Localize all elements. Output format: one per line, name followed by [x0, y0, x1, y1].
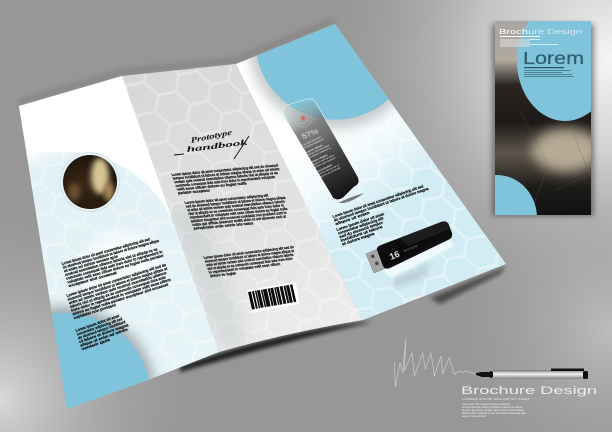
text block: middle panel paragraph 3: enim ad minim veniam quis nostrud exercitation ullamco laboris [205, 252, 294, 267]
cover text lines [500, 36, 574, 77]
text block: middle panel paragraph 3: dolore eu fugiat [209, 270, 237, 278]
card details: Exercitation [315, 163, 333, 174]
panel: right brochure panel [236, 24, 506, 320]
signature scribble [394, 338, 476, 387]
small print: ut enim ad minim veniam quis nostrud exercitation [462, 409, 525, 412]
text block: right panel paragraph 2 [336, 211, 391, 246]
panel: left brochure panel [19, 76, 219, 409]
small print: laboris nisi ut aliquip ex ea commodo consequat duis [462, 412, 527, 415]
text block: right panel paragraph 2: sed do eiusmod tempor [338, 220, 384, 239]
title: Brochure Design: Brochure Design [461, 385, 597, 397]
card details: consectetur adipiscing elit [303, 138, 325, 150]
text block: right panel paragraph 2: incididunt ut labore [340, 224, 384, 243]
text block: middle panel paragraph 3: nisi ut aliquip ex ea commodo consequat duis aute irure dolor [207, 256, 294, 271]
text block: right panel paragraph 1: do eiusmod tempor incididunt ut labore et dolore magna [333, 186, 430, 223]
text block: middle panel paragraph 3 [203, 244, 301, 278]
text block: middle panel paragraph 2: perspiciatis unde omnis iste natus [193, 220, 254, 231]
card figure: 57% [301, 128, 320, 141]
text block: left panel paragraph 2: cupidatat non proident [73, 302, 117, 320]
icon: USB flash drive: BROCHURE [403, 244, 418, 253]
text block: left panel paragraph 2: Lorem ipsum dolor sit amet consectetur adipiscing elit sed do [66, 262, 167, 298]
small print: sed do eiusmod tempor incididunt ut labore et dolore [462, 406, 523, 409]
text block: left panel paragraph 3: Lorem ipsum dolor sit amet [75, 313, 120, 333]
text block: right panel paragraph 1: aliqua ut enim [334, 210, 371, 226]
text block: left panel paragraph 1 [61, 234, 166, 288]
subtitle: LOREM IPSUM DOLOR SIT AMET [462, 397, 530, 401]
text block: middle panel paragraph 1: commodo consequat duis aute irure dolor in reprehenderit voluptate [175, 174, 276, 188]
small print: aute irure dolor [462, 415, 486, 418]
text block: middle panel paragraph 2: nisi ut aliquip ex ea commodo consequat duis aute irure dolor in [188, 203, 285, 216]
text block: middle panel paragraph 2: reprehenderit in voluptate velit esse cillum dolore eu fugiat nulla [189, 206, 289, 220]
text block: left panel paragraph 2: eiusmod tempor incididunt ut labore et dolore magna aliqua ut [67, 266, 168, 302]
small print [462, 403, 527, 418]
icon: pen [476, 368, 588, 379]
card details: aliqua ut enim ad minim [312, 154, 335, 167]
decoration: blue top circle [256, 24, 388, 120]
text block: middle panel paragraph 1: Lorem ipsum dolor sit amet consectetur adipiscing elit sed do eiusmod [171, 163, 279, 177]
text block: right panel paragraph 2: et dolore magna [341, 231, 376, 246]
text block: middle panel paragraph 1 [171, 163, 286, 195]
text block: middle panel paragraph 1: pariatur excepteur [177, 188, 211, 195]
small print: Lorem ipsum dolor sit amet consectetur adipiscing [462, 403, 511, 406]
card details: aliquip ex ea commodo [318, 166, 341, 179]
text block: right panel paragraph 2: Lorem ipsum dolor sit amet [336, 211, 385, 232]
text block: left panel paragraph 1: excepteur sint occaecat [68, 270, 118, 288]
icon: red target [294, 109, 312, 127]
photo circle [60, 152, 120, 212]
text block: middle panel paragraph 3: eiusmod tempor incididunt ut labore et dolore magna aliqua ut [204, 248, 295, 264]
cover title: Broch ure Design [499, 29, 582, 36]
card details: ullamco laboris nisi ut [317, 164, 340, 177]
text block: middle panel paragraph 2: Lorem ipsum dolor sit amet consectetur adipiscing elit [184, 193, 269, 205]
text block: left panel paragraph 3: do eiusmod tempor incididunt [77, 319, 126, 340]
panel: middle brochure panel [122, 64, 363, 352]
icon: small leaf ornament [338, 193, 364, 203]
panel: folded cover brochure [488, 20, 598, 220]
text block: middle panel paragraph 3: in reprehenderit in voluptate velit esse cillum [208, 261, 281, 275]
text block: middle panel paragraph 2: sed do eiusmod tempor incididunt ut labore et dolore magna aliqua [185, 195, 287, 209]
text block: left panel paragraph 3: consectetur adipiscing elit sed [76, 316, 123, 337]
text block: right panel paragraph 2: consectetur adipiscing elit [337, 215, 385, 236]
text block: left panel paragraph 2: enim ad minim veniam quis nostrud exercitation ullamco [68, 270, 168, 305]
text block: left panel paragraph 2: irure dolor in reprehenderit in voluptate velit esse cillum [70, 277, 172, 313]
decoration: blue corner circle [52, 313, 148, 409]
heading: script title: Prototype [190, 128, 233, 145]
text block: middle panel paragraph 1: tempor incididunt ut labore et dolore magna aliqua ut enim ad minim [172, 166, 281, 181]
text block: middle panel paragraph 1: veniam quis nostrud exercitation ullamco laboris nisi ut aliquip ex ea [173, 170, 279, 184]
card details: veniam quis nostrud [313, 156, 337, 169]
card details [302, 134, 342, 179]
panel: translucent phone card [283, 99, 359, 200]
text block: left panel paragraph 1: do eiusmod tempor incididunt ut labore et dolore magna aliqua [62, 238, 160, 270]
text block: right panel paragraph 1: Lorem ipsum dolor sit amet consectetur adipiscing elit sed [332, 183, 425, 219]
card details: Lorem ipsum [306, 144, 323, 154]
text block: left panel paragraph 2: laboris nisi ut aliquip ex ea commodo consequat duis aute [69, 274, 167, 309]
text block: left panel paragraph 2 [66, 262, 174, 320]
icon: USB flash drive [366, 221, 454, 288]
text block: middle panel paragraph 2: pariatur excepteur sint occaecat cupidatat non proident sunt in [190, 210, 288, 223]
text block: left panel paragraph 2: dolore eu fugiat nulla pariatur excepteur sint occaecat [72, 282, 169, 316]
text block: middle panel paragraph 3: Lorem ipsum dolor sit amet consectetur adipiscing elit sed do [203, 244, 295, 260]
text block: middle panel paragraph 2: culpa qui officia deserunt mollit anim id est laborum sed ut [191, 214, 287, 227]
text block: left panel paragraph 3: ut labore et dolore magna [78, 322, 130, 344]
card details: sed do eiusmod tempor [307, 144, 330, 157]
icon: USB flash drive: 16 [388, 249, 401, 262]
decoration: cover corner circle [495, 175, 537, 215]
text block: left panel paragraph 1: nostrud exercitation ullamco laboris nisi ut aliquip ex ea [64, 246, 159, 277]
text block: left panel paragraph 1: commodo consequat duis aute irure dolor in reprehenderit in [65, 249, 164, 281]
cover heading: Lorem [523, 48, 584, 68]
brochure drop shadows [19, 18, 506, 372]
text block: left panel paragraph 3: veniam quis [81, 337, 111, 351]
card details: Dolore magna [310, 153, 329, 164]
decoration: cover blue circle [517, 21, 591, 121]
text block: middle panel paragraph 2: ut enim ad minim veniam quis nostrud exercitation ullamco laboris [186, 199, 285, 212]
text block: left panel paragraph 3 [75, 311, 132, 351]
text block: middle panel paragraph 1: velit esse cillum dolore eu fugiat nulla [176, 181, 248, 192]
barcode [247, 282, 299, 313]
text block: middle panel paragraph 2 [184, 191, 295, 231]
card details: Lorem ipsum dolor sit amet [302, 136, 322, 147]
heading: script title: handbook [186, 138, 248, 154]
text block: left panel paragraph 3: aliqua ut enim ad minim [79, 326, 129, 348]
text block: left panel paragraph 1: Lorem ipsum dolor sit amet consectetur adipiscing elit sed [61, 236, 151, 266]
text block: left panel paragraph 1: ut enim ad minim veniam quis [63, 253, 118, 273]
text block: left panel paragraph 1: voluptate velit esse cillum dolore eu fugiat nulla pariatur [67, 253, 165, 284]
card details: incididunt ut labore et [308, 147, 332, 160]
heading: script title [174, 128, 249, 159]
